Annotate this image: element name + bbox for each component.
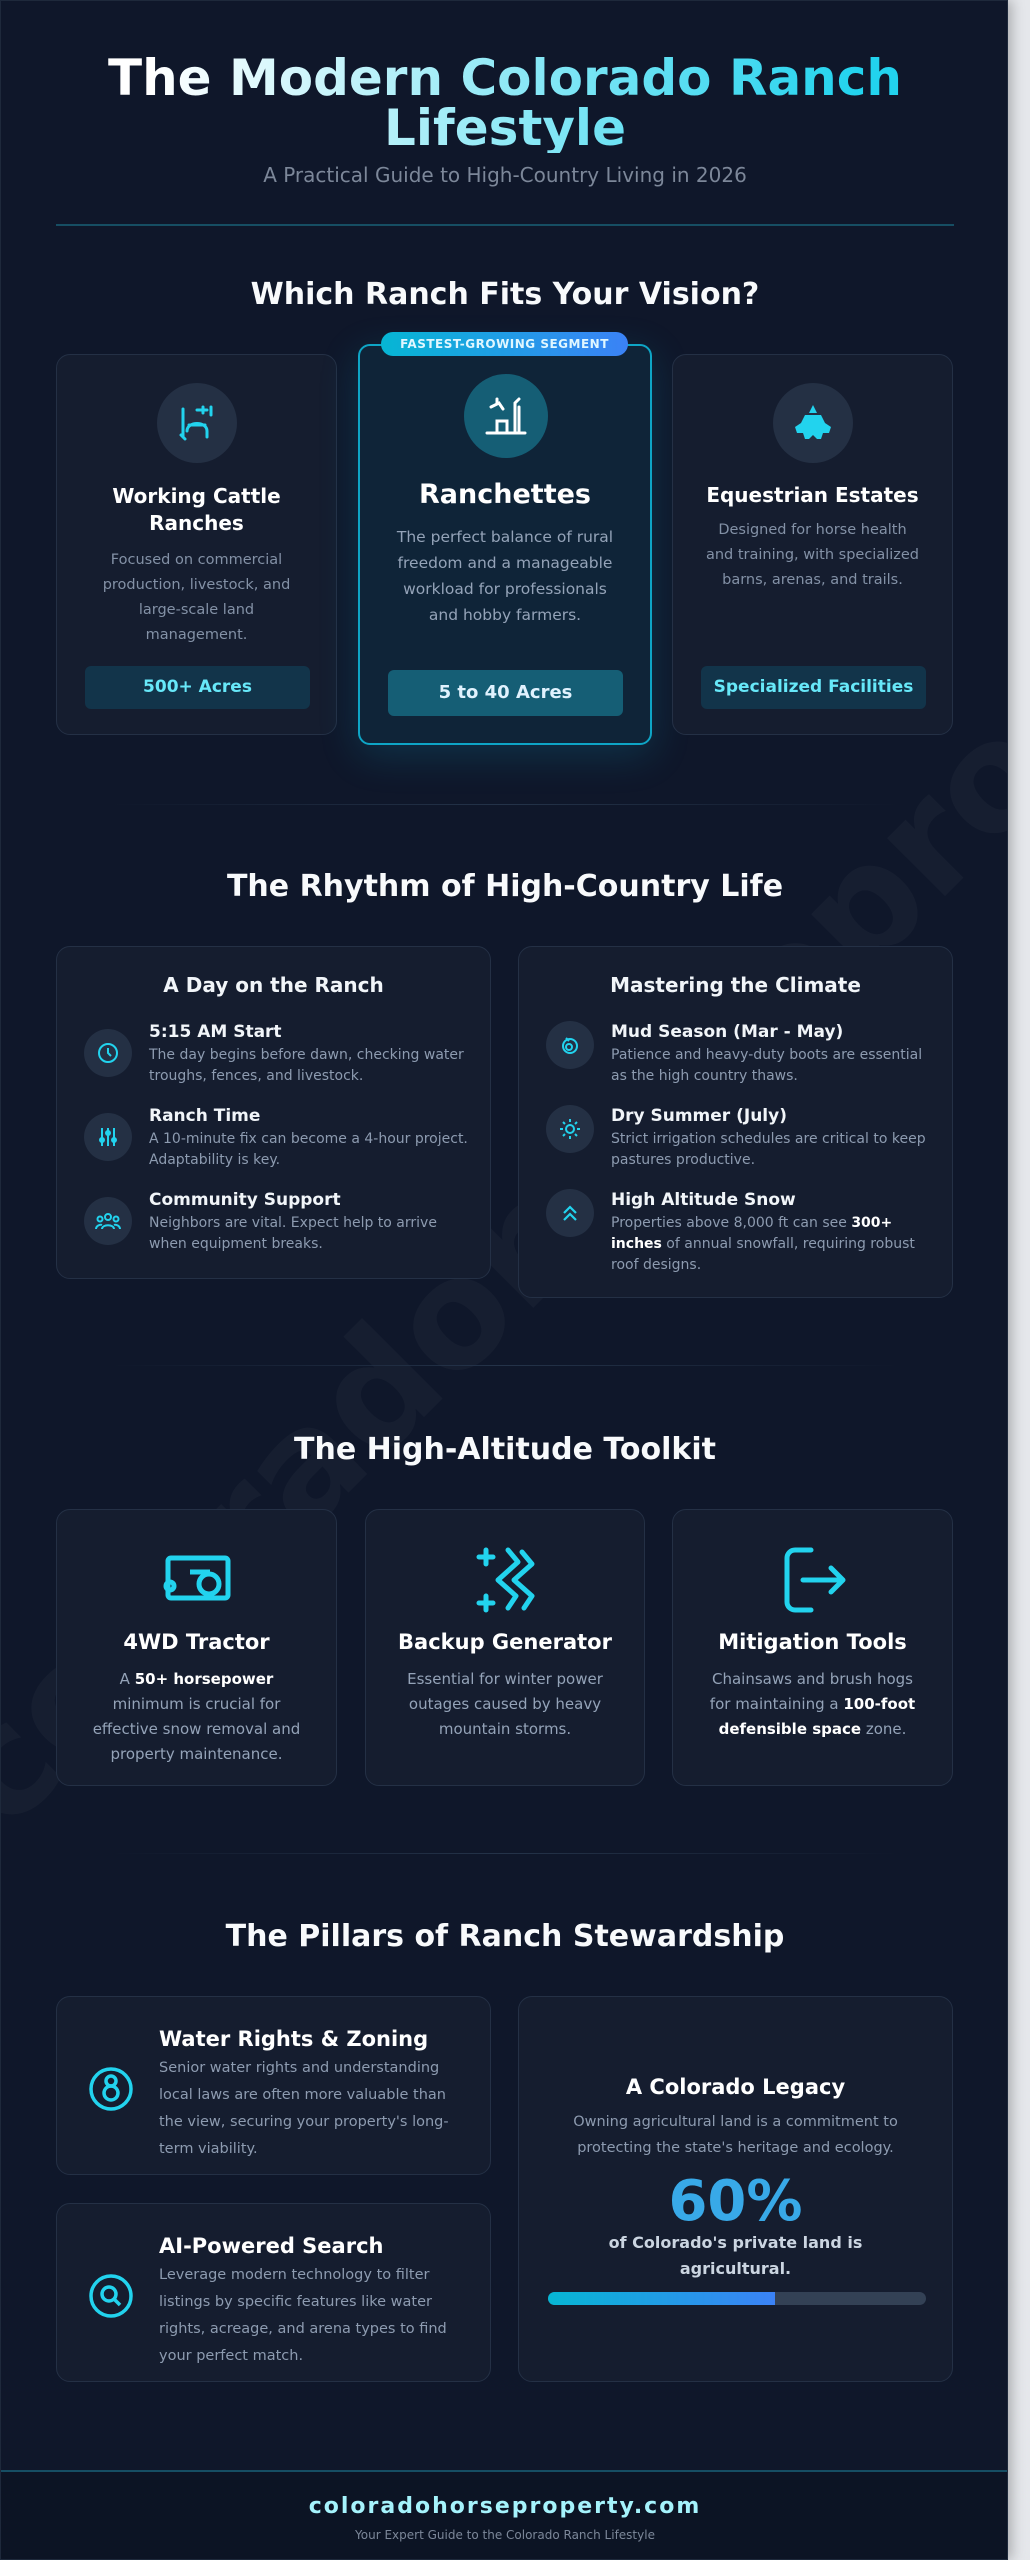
icon: mud — [546, 1021, 594, 1069]
item: 5:15 am: 5:15 AM Start — [149, 1022, 282, 1042]
heading: toolkit: The High-Altitude Toolkit — [294, 1432, 716, 1467]
card: mitigation tools: Chainsaws and brush hogs for maintaining a 100-foot defensible space zone. — [710, 1670, 915, 1738]
item: community: Neighbors are vital. Expect help to arrive — [149, 1215, 437, 1231]
card: colorado legacy: A Colorado Legacy — [626, 2075, 845, 2099]
heading: rhythm: The Rhythm of High-Country Life — [227, 869, 783, 904]
item: community: when equipment breaks. — [149, 1236, 323, 1252]
progress bar — [548, 2292, 926, 2305]
item: mud season: as the high country thaws. — [611, 1068, 798, 1084]
item: 5:15 am: The day begins before dawn, checking water — [149, 1047, 464, 1063]
stat: 60%: 60% — [668, 2169, 803, 2234]
item: community: Community Support — [149, 1190, 341, 1210]
panel: a day on the ranch: A Day on the Ranch — [163, 973, 384, 997]
icon: generator — [476, 1548, 535, 1612]
item: mud season: Mud Season (Mar - May) — [611, 1022, 843, 1042]
item: 5:15 am: troughs, fences, and livestock. — [149, 1068, 363, 1084]
card: backup generator: Backup Generator — [398, 1630, 612, 1654]
title — [1, 53, 1009, 153]
item: high altitude snow: roof designs. — [611, 1257, 701, 1273]
pill: fastest growing: FASTEST-GROWING SEGMENT — [400, 337, 609, 351]
heading: pillars: The Pillars of Ranch Stewardship — [226, 1919, 784, 1954]
title: Lifestyle — [384, 99, 626, 157]
card: working cattle ranches — [56, 354, 337, 735]
card: colorado legacy — [518, 1996, 953, 2382]
card: 4wd tractor: 4WD Tractor — [123, 1630, 270, 1654]
heading: ranch types: Which Ranch Fits Your Vision? — [251, 277, 759, 312]
icon: people — [84, 1197, 132, 1245]
icon: cattle — [157, 383, 237, 463]
item: high altitude snow: inches of annual snowfall, requiring robust — [611, 1236, 915, 1252]
card: ranchettes (featured): Ranchettes — [419, 479, 591, 510]
card: working cattle ranches: Working Cattle — [112, 484, 281, 508]
icon: sun — [546, 1105, 594, 1153]
card: 4wd tractor — [56, 1509, 337, 1786]
icon: search — [89, 2274, 133, 2318]
badge: 5 to 40 acres — [388, 670, 623, 716]
subtitle: A Practical Guide to High-Country Living in 2026 — [263, 163, 747, 187]
panel: a day on the ranch — [56, 946, 491, 1279]
icon: ranchette — [464, 374, 548, 458]
icon: sliders — [84, 1113, 132, 1161]
card: mitigation tools: Mitigation Tools — [718, 1630, 907, 1654]
item: high altitude snow: High Altitude Snow — [611, 1190, 796, 1210]
card: working cattle ranches: Focused on commercial production, livestock, and large-scale land management. — [103, 552, 290, 643]
item: mud season — [611, 1022, 922, 1084]
icon: clock — [84, 1029, 132, 1077]
card: equestrian estates: barns, arenas, and trails. — [722, 572, 903, 588]
item: dry summer: Dry Summer (July) — [611, 1106, 787, 1126]
card: colorado legacy: Owning agricultural land is a commitment to protecting the state's heritage and ecology. — [573, 2114, 898, 2156]
item: community — [149, 1190, 437, 1252]
footer: coloradohorseproperty.com — [309, 2494, 701, 2519]
icon: tractor — [164, 1556, 230, 1600]
item: ranch time: Adaptability is key. — [149, 1152, 280, 1168]
card: ai search: Leverage modern technology to filter listings by specific features like water rights, acreage, and arena types to find your perfect match. — [159, 2267, 447, 2364]
item: high altitude snow: Properties above 8,000 ft can see 300+ — [611, 1215, 892, 1231]
badge: specialized facilities: Specialized Facilities — [714, 677, 913, 697]
item: ranch time: A 10-minute fix can become a 4-hour project. — [149, 1131, 468, 1147]
item: dry summer: Strict irrigation schedules are critical to keep — [611, 1131, 926, 1147]
card: equestrian estates — [672, 354, 953, 735]
card: backup generator — [365, 1509, 645, 1786]
card: ranchettes (featured) — [358, 344, 652, 745]
icon: horse — [773, 383, 853, 463]
card: equestrian estates: Designed for horse health — [718, 522, 907, 538]
card: water rights — [56, 1996, 491, 2175]
card: water rights: Water Rights & Zoning — [159, 2027, 428, 2051]
panel: mastering the climate — [518, 946, 953, 1298]
card: 4wd tractor: A 50+ horsepower minimum is crucial for effective snow removal and property maintenance. — [93, 1670, 300, 1763]
item: dry summer: pastures productive. — [611, 1152, 755, 1168]
card: equestrian estates: Equestrian Estates — [706, 483, 919, 507]
icon: water — [89, 2067, 133, 2111]
badge: 5 to 40 acres: 5 to 40 Acres — [439, 682, 572, 703]
badge: 500+ acres: 500+ Acres — [143, 677, 252, 697]
icon: chevrons up — [546, 1189, 594, 1237]
card: mitigation tools — [672, 1509, 953, 1786]
panel: mastering the climate: Mastering the Climate — [610, 973, 861, 997]
pill: fastest growing — [381, 332, 628, 356]
card: equestrian estates: and training, with specialized — [706, 547, 919, 563]
badge: 500+ acres — [85, 666, 310, 709]
item: ranch time: Ranch Time — [149, 1106, 260, 1126]
badge: specialized facilities — [701, 666, 926, 709]
title: The Modern Colorado Ranch — [108, 49, 902, 107]
footer: Your Expert Guide to the Colorado Ranch Lifestyle — [355, 2528, 655, 2542]
card: ai search: AI-Powered Search — [159, 2234, 383, 2258]
item: dry summer — [611, 1106, 926, 1168]
item: high altitude snow — [611, 1190, 915, 1273]
item: ranch time — [149, 1106, 468, 1168]
item: mud season: Patience and heavy-duty boots are essential — [611, 1047, 922, 1063]
card: colorado legacy: of Colorado's private land is agricultural. — [609, 2233, 862, 2278]
footer — [1, 2470, 1009, 2560]
card: water rights: Senior water rights and understanding local laws are often more valuable than the view, securing your property's long-term viability. — [159, 2060, 449, 2157]
card: working cattle ranches: Ranches — [149, 511, 244, 535]
card: ranchettes (featured): The perfect balance of rural freedom and a manageable workload for professionals and hobby farmers. — [397, 528, 613, 624]
card: backup generator: Essential for winter power outages caused by heavy mountain storms. — [407, 1670, 603, 1738]
item: 5:15 am — [148, 1022, 464, 1084]
card: ai search — [56, 2203, 491, 2382]
icon: exit arrow — [784, 1548, 846, 1612]
